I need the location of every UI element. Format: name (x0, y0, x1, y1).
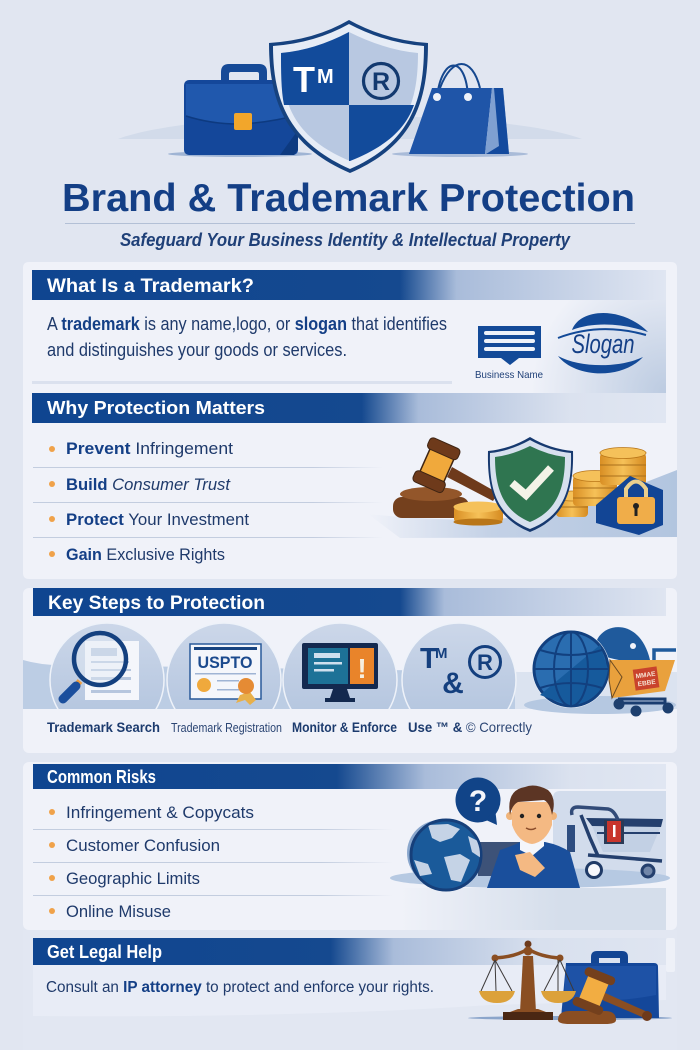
step: trademark search icon (49, 624, 165, 709)
hero illustration (118, 20, 582, 173)
icon: backdrop swoosh (118, 116, 582, 139)
text block: definition: and distinguishes your goods or services. (47, 340, 347, 360)
text block: legal advice: Consult an IP attorney to protect and enforce your rights. (46, 979, 434, 996)
icon: shopping cart (609, 650, 676, 716)
icon: trademark shield (269, 20, 428, 173)
panel: why protection matters (23, 300, 677, 579)
step: registration certificate icon (166, 624, 282, 709)
illustration: scales, briefcase and gavel (468, 938, 675, 1024)
step band background (23, 660, 520, 709)
icon: trademark shield: M (317, 66, 334, 88)
list: risks: Customer Confusion (66, 836, 220, 855)
step: trademark symbols icon: R (477, 650, 493, 675)
panel: get legal help (23, 930, 677, 1050)
list: benefits: Build Consumer Trust (66, 475, 231, 494)
icon: trademark shield: R (372, 68, 390, 96)
step labels: Trademark Registration (171, 720, 282, 735)
list: benefits: Protect Your Investment (66, 510, 249, 529)
icon: question speech bubble (456, 778, 500, 825)
heading: key steps: Key Steps to Protection (48, 593, 265, 614)
heading: common risks (33, 764, 666, 789)
icon: globe (532, 630, 610, 708)
icon: shopping cart with warning (567, 807, 663, 878)
icon: green check shield (488, 437, 573, 532)
step labels: Monitor & Enforce (292, 719, 397, 735)
panel: what is a trademark (23, 262, 677, 386)
icon: briefcase (561, 951, 659, 1018)
icon: briefcase (168, 64, 312, 157)
step labels (47, 719, 532, 735)
title: Brand & Trademark Protection (62, 177, 635, 220)
list: risks: Geographic Limits (66, 869, 200, 888)
heading: what is a trademark (32, 270, 666, 300)
heading: get legal help: Get Legal Help (47, 942, 162, 962)
heading: why protection matters (32, 393, 666, 423)
icon: gavel (558, 966, 652, 1024)
icon: slogan logo (558, 313, 648, 373)
step: monitor and enforce icon: ! (357, 653, 367, 684)
icon: business name banner (475, 326, 543, 381)
icon: shopping cart: EBBE (637, 679, 657, 688)
icon: shopping bag (392, 64, 528, 157)
panel: common risks (23, 762, 677, 930)
list: benefits (49, 439, 249, 564)
step: trademark symbols icon: M (435, 645, 448, 662)
heading: key steps (33, 588, 666, 616)
list: benefits: Gain Exclusive Rights (66, 545, 225, 564)
step: trademark symbols icon: T (420, 643, 438, 675)
illustration: person, globe and cart (390, 778, 670, 930)
step: trademark symbols icon (401, 624, 517, 709)
icon: slogan logo: Slogan (572, 329, 634, 359)
icon: shopping cart: MMAE (635, 671, 657, 680)
icon: gold coin (454, 502, 503, 526)
list: risks (49, 803, 254, 921)
step: registration certificate icon: USPTO (198, 653, 252, 672)
text block: definition: A trademark is any name,logo, or slogan that identifies (47, 314, 447, 334)
heading: what is a trademark: What Is a Trademark? (47, 276, 254, 297)
text block: definition (47, 314, 447, 360)
step labels: Trademark Search (47, 719, 160, 735)
heading: common risks: Common Risks (47, 767, 156, 787)
illustration: globe and shopping cart (524, 627, 676, 716)
icon: question speech bubble: ? (469, 785, 487, 818)
icon: gavel (393, 437, 498, 518)
icon: thinking person (487, 786, 580, 888)
step: monitor and enforce icon (282, 624, 398, 709)
panel: key steps to protection (23, 588, 677, 753)
icon: padlock on hexagon (596, 476, 663, 535)
list: risks: Online Misuse (66, 902, 171, 921)
list: risks: Infringement & Copycats (66, 803, 254, 822)
icon: coin stacks (555, 448, 646, 517)
step: trademark symbols icon: & (442, 667, 464, 700)
icon: business name banner: Business Name (475, 369, 543, 381)
list: benefits: Prevent Infringement (66, 439, 233, 458)
icon: scales of justice (479, 940, 576, 1020)
icon: world globe (407, 820, 484, 890)
heading: get legal help (33, 938, 666, 965)
illustration: gavel, shield, coins and lock (368, 437, 677, 538)
icon: trademark shield: T (293, 59, 315, 100)
subtitle: Safeguard Your Business Identity & Intellectual Property (120, 230, 571, 250)
step labels: Use ™ & © Correctly (408, 719, 532, 735)
heading: why protection matters: Why Protection Matters (47, 397, 265, 418)
